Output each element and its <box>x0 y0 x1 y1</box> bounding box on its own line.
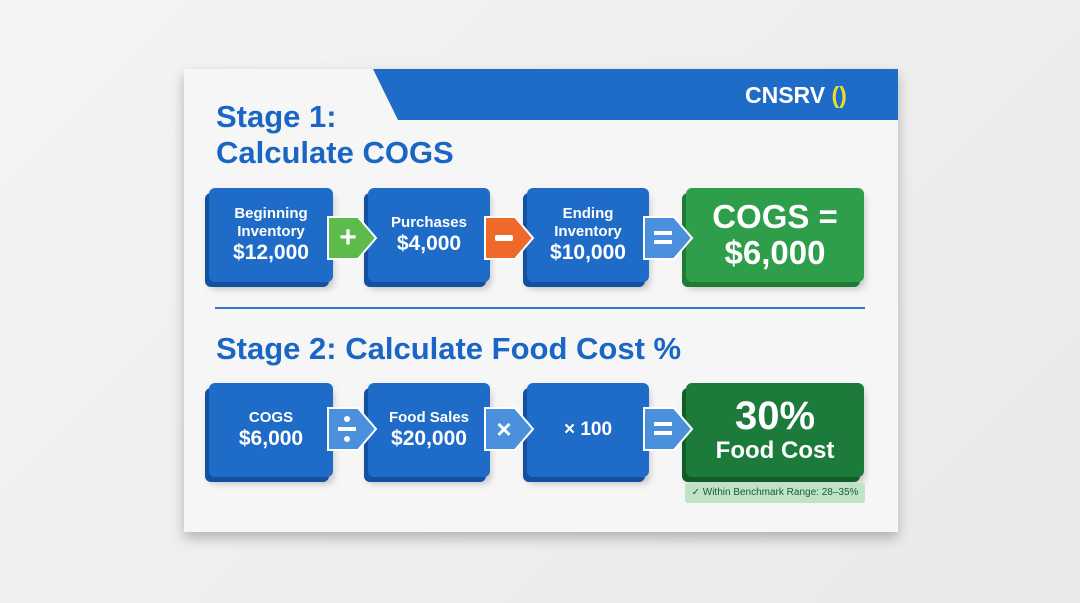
box food cost result <box>686 383 864 477</box>
box food cost result: 30% <box>735 394 815 438</box>
box purchases: $4,000 <box>397 232 461 255</box>
card <box>184 69 898 532</box>
box beginning inventory: Beginning <box>234 205 308 222</box>
box cogs: $6,000 <box>239 427 303 450</box>
box food sales <box>368 383 490 477</box>
title stage 2: Stage 2: Calculate Food Cost % <box>216 331 681 366</box>
box ending inventory: $10,000 <box>550 241 626 264</box>
box beginning inventory: Inventory <box>237 223 305 240</box>
arrow plus: + <box>339 221 357 254</box>
arrow equals 2 <box>643 407 694 451</box>
box ending inventory <box>527 188 649 282</box>
box purchases: Purchases <box>391 214 467 231</box>
title stage 1: Stage 1: <box>216 99 337 134</box>
arrow divide <box>327 407 378 451</box>
box purchases <box>368 188 490 282</box>
benchmark badge: ✓ Within Benchmark Range: 28–35% <box>692 487 858 498</box>
arrow times: × <box>496 414 512 444</box>
arrow plus <box>327 216 378 260</box>
arrow minus <box>484 216 534 260</box>
box x100 <box>527 383 649 477</box>
title stage 1: Calculate COGS <box>216 135 454 170</box>
benchmark badge <box>685 483 865 503</box>
box COGS result: $6,000 <box>725 234 825 271</box>
box ending inventory: Inventory <box>554 223 622 240</box>
box COGS result <box>686 188 864 282</box>
divider <box>215 307 865 309</box>
box beginning inventory <box>209 188 333 282</box>
box cogs: COGS <box>249 409 293 426</box>
box food sales: $20,000 <box>391 427 467 450</box>
box beginning inventory: $12,000 <box>233 241 309 264</box>
arrow times <box>484 407 534 451</box>
title stage 1 <box>216 99 454 170</box>
banner <box>373 69 898 120</box>
box COGS result: COGS = <box>712 198 838 235</box>
box food cost result: Food Cost <box>716 437 834 464</box>
logo: CNSRV () <box>745 82 847 108</box>
box cogs <box>209 383 333 477</box>
box ending inventory: Ending <box>563 205 613 222</box>
arrow equals <box>643 216 694 260</box>
box food sales: Food Sales <box>389 409 469 426</box>
box x100: × 100 <box>564 419 612 440</box>
